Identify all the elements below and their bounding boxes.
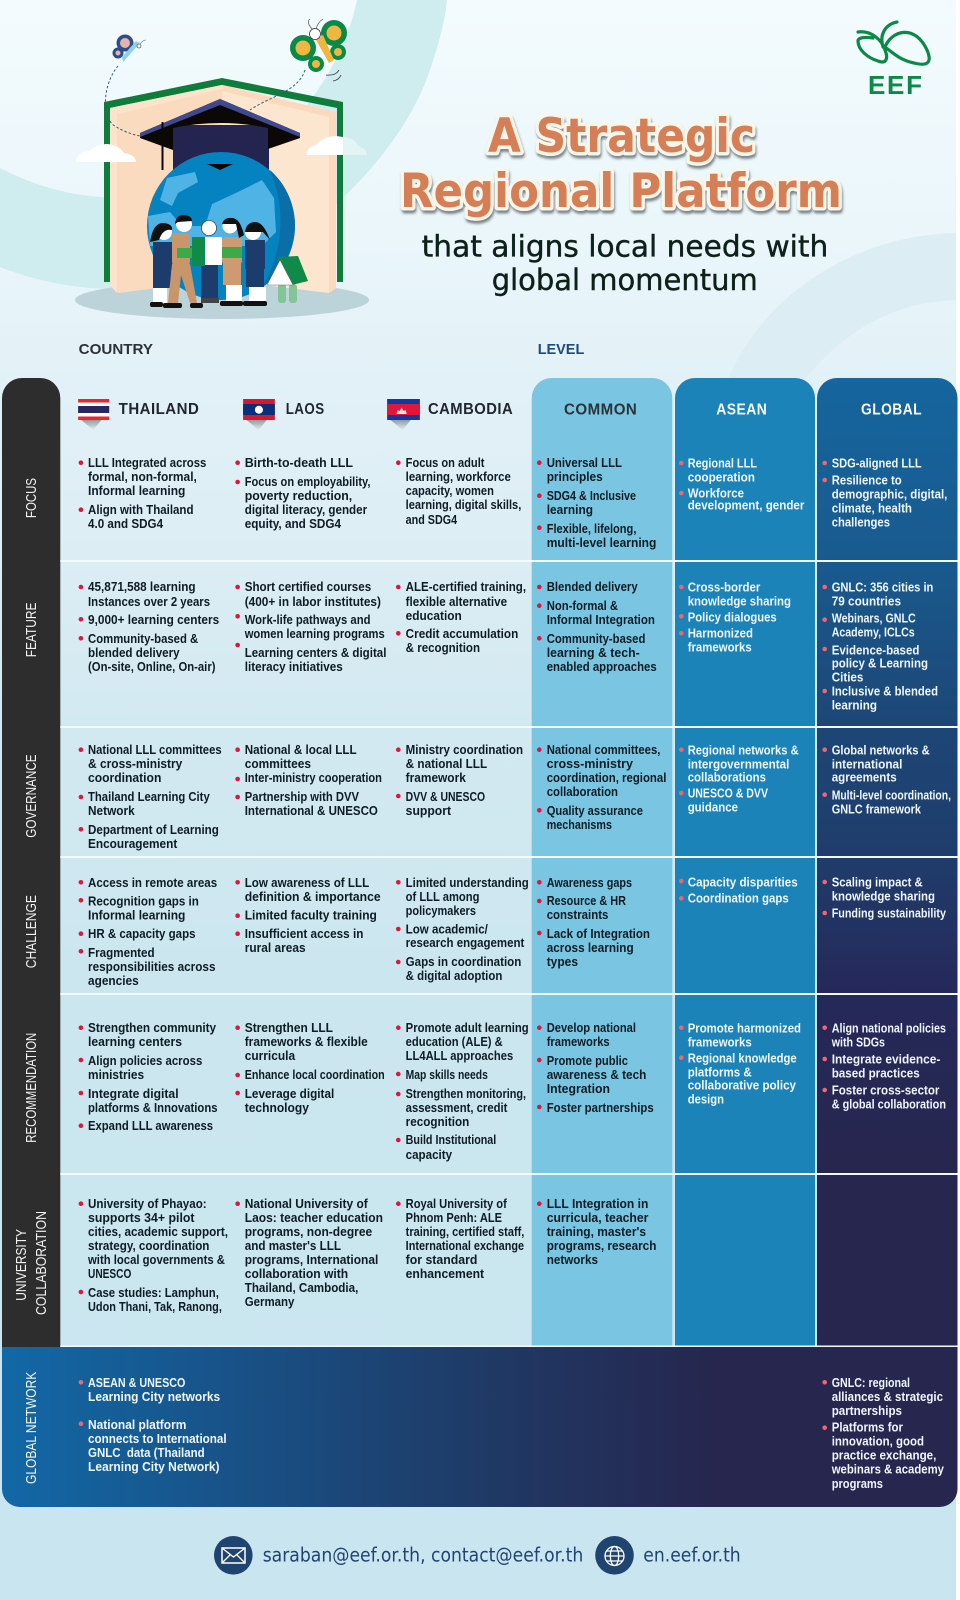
panel: recommendation, Laos: technology xyxy=(245,1101,309,1115)
heading: country: COUNTRY xyxy=(79,341,153,358)
panel: recommendation, common: Foster partnerships xyxy=(547,1101,654,1115)
panel: governance, ASEAN xyxy=(679,743,799,814)
panel: governance, Thailand: Department of Learning xyxy=(88,823,219,837)
icon: web globe xyxy=(595,1536,634,1575)
global network band xyxy=(2,1347,958,1507)
panel: governance, ASEAN: guidance xyxy=(688,800,738,814)
panel: challenge, ASEAN xyxy=(679,875,798,906)
panel: recommendation, global: & global collaboration xyxy=(832,1097,946,1111)
panel: challenge, Cambodia: Gaps in coordination xyxy=(406,955,521,969)
panel: recommendation, Thailand: Align policies across xyxy=(88,1054,202,1068)
panel: governance, ASEAN: UNESCO & DVV xyxy=(688,786,769,800)
panel: feature, ASEAN xyxy=(679,580,791,655)
panel: focus, Laos: Birth-to-death LLL xyxy=(245,456,353,470)
panel: challenge, Cambodia: research engagement xyxy=(406,936,525,950)
panel: governance, Cambodia: Ministry coordination xyxy=(406,743,523,757)
ground shadow xyxy=(75,281,369,319)
panel: recommendation, common: Promote public xyxy=(547,1054,628,1068)
panel: governance, Cambodia: support xyxy=(406,804,452,818)
panel: feature, Cambodia: Credit accumulation xyxy=(406,627,518,641)
panel: recommendation, ASEAN: design xyxy=(688,1092,724,1106)
panel: governance, Laos: Partnership with DVV xyxy=(245,790,360,804)
panel: focus, Laos xyxy=(235,456,370,531)
panel: focus, Thailand: Informal learning xyxy=(88,484,185,498)
panel: challenge, common xyxy=(537,876,650,969)
panel: recommendation, ASEAN xyxy=(679,1021,801,1106)
mascot with bag xyxy=(267,256,308,303)
panel: governance, common: coordination, regional xyxy=(547,771,666,785)
panel: recommendation, Laos: frameworks & flexible xyxy=(245,1035,368,1049)
panel: university collaboration, Laos: Germany xyxy=(245,1295,294,1309)
student left xyxy=(150,223,172,307)
panel: governance, Laos xyxy=(235,743,382,818)
panel: challenge, common: constraints xyxy=(547,908,608,922)
panel: recommendation, Thailand: learning centers xyxy=(88,1035,182,1049)
panel: global network, country: connects to International xyxy=(88,1432,227,1446)
panel: recommendation, Laos: Strengthen LLL xyxy=(245,1021,333,1035)
flight paths xyxy=(105,66,305,136)
panel: governance, Laos: committees xyxy=(245,757,311,771)
panel: challenge, Thailand: Access in remote areas xyxy=(88,876,217,890)
panel: challenge, Laos: definition & importance xyxy=(245,890,381,904)
panel: recommendation, common: awareness & tech xyxy=(547,1068,646,1082)
panel: governance, global: international xyxy=(832,757,902,771)
panel: recommendation, common xyxy=(537,1021,654,1115)
panel: challenge, Cambodia: & digital adoption xyxy=(406,969,502,983)
panel: recommendation, ASEAN: platforms & xyxy=(688,1065,752,1079)
panel: challenge, Thailand xyxy=(79,876,217,988)
panel: governance, Thailand: & cross-ministry xyxy=(88,757,182,771)
panel: feature, ASEAN: Policy dialogues xyxy=(688,610,777,624)
panel: university collaboration, Laos: Thailand, Cambodia, xyxy=(245,1281,358,1295)
panel: recommendation, ASEAN: frameworks xyxy=(688,1035,752,1049)
contact: email: saraban@eef.or.th, contact@eef.or.th xyxy=(263,1543,583,1566)
panel: recommendation, Laos: Leverage digital xyxy=(245,1087,334,1101)
panel: feature, common xyxy=(537,580,657,674)
panel: university collaboration, Thailand: Udon Thani, Tak, Ranong, xyxy=(88,1300,222,1314)
panel: challenge, common: across learning xyxy=(547,941,634,955)
panel: feature, Laos: (400+ in labor institutes) xyxy=(245,595,381,609)
panel: global network, country: Learning City Network) xyxy=(88,1460,220,1474)
header: Cambodia xyxy=(387,399,513,430)
panel: focus, Laos: equity, and SDG4 xyxy=(245,517,341,531)
panel: governance, Thailand: coordination xyxy=(88,771,161,785)
row labels: COLLABORATION xyxy=(34,1211,50,1315)
panel: governance, Laos: International & UNESCO xyxy=(245,804,378,818)
panel: focus, common: principles xyxy=(547,470,603,484)
panel: global network, country: Learning City networks xyxy=(88,1390,220,1404)
panel: recommendation, global: with SDGs xyxy=(831,1035,885,1049)
panel: challenge, common: types xyxy=(547,955,578,969)
globe xyxy=(147,152,295,300)
panel: challenge, Laos: rural areas xyxy=(245,941,306,955)
panel: recommendation, Cambodia: LL4ALL approaches xyxy=(406,1049,513,1063)
panel: feature, Cambodia: flexible alternative xyxy=(406,595,507,609)
panel: challenge, Laos: Insufficient access in xyxy=(245,927,363,941)
panel: focus, Laos: Focus on employability, xyxy=(245,475,370,489)
panel: university collaboration, common: curricula, teacher xyxy=(547,1211,649,1225)
panel: university collaboration, common: programs, research xyxy=(547,1239,656,1253)
panel: university collaboration, Thailand: Case studies: Lamphun, xyxy=(88,1286,219,1300)
teacher with glasses xyxy=(163,215,203,308)
panel: challenge, Cambodia xyxy=(396,876,529,983)
panel: challenge, Thailand: Informal learning xyxy=(88,908,185,922)
panel: governance, common: mechanisms xyxy=(547,818,612,832)
panel: governance, common: collaboration xyxy=(547,785,618,799)
row labels: FOCUS xyxy=(24,478,40,518)
panel: feature, Thailand: 9,000+ learning centers xyxy=(88,613,219,627)
panel: focus, Thailand: 4.0 and SDG4 xyxy=(88,517,163,531)
panel: recommendation, Thailand: Integrate digital xyxy=(88,1087,179,1101)
panel: governance, ASEAN: collaborations xyxy=(688,770,766,784)
panel: university collaboration, Cambodia: for standard xyxy=(406,1253,477,1267)
panel: challenge, common: Awareness gaps xyxy=(547,876,632,890)
panel: university collaboration, Cambodia: International exchange xyxy=(406,1239,524,1253)
panel: focus, Cambodia: Focus on adult xyxy=(406,456,485,470)
panel: governance, Cambodia: & national LLL xyxy=(406,757,487,771)
panel: university collaboration, Cambodia: Phnom Penh: ALE xyxy=(406,1211,502,1225)
panel: focus, global: challenges xyxy=(832,515,890,529)
panel: governance, global: Global networks & xyxy=(832,743,930,757)
man in white coat xyxy=(192,220,222,303)
panel: recommendation, Cambodia: education (ALE) & xyxy=(406,1035,503,1049)
panel: feature, ASEAN: Harmonized xyxy=(688,627,753,641)
graduation cap xyxy=(140,99,300,173)
panel: university collaboration, Laos: programs, non-degree xyxy=(245,1225,372,1239)
teacher in brown xyxy=(220,218,244,306)
panel: university collaboration, Cambodia: Royal University of xyxy=(406,1197,508,1211)
header: Global: GLOBAL xyxy=(861,402,922,419)
panel: challenge, Cambodia: Low academic/ xyxy=(406,922,488,936)
panel: focus, Thailand: formal, non-formal, xyxy=(88,470,197,484)
panel: focus, Cambodia: and SDG4 xyxy=(406,513,457,527)
panel: challenge, global: Scaling impact & xyxy=(832,875,923,889)
panel: feature, Cambodia xyxy=(396,580,526,655)
panel: governance, Laos: Inter-ministry cooperation xyxy=(245,771,382,785)
panel: university collaboration, common: networks xyxy=(547,1253,598,1267)
panel: feature, Thailand xyxy=(79,580,219,674)
panel: challenge, Thailand: responsibilities across xyxy=(88,960,216,974)
panel: feature, Laos: Short certified courses xyxy=(245,580,371,594)
panel: challenge, Laos xyxy=(235,876,381,955)
panel: focus, Thailand: LLL Integrated across xyxy=(88,456,206,470)
panel: recommendation, Thailand: Strengthen community xyxy=(88,1021,216,1035)
panel: focus, Thailand xyxy=(79,456,206,531)
panel: challenge, Laos: Limited faculty training xyxy=(245,908,377,922)
panel: recommendation, Thailand: platforms & Innovations xyxy=(88,1101,218,1115)
panel: feature, global: Academy, ICLCs xyxy=(832,625,915,639)
panel: governance, Thailand: National LLL committees xyxy=(88,743,222,757)
panel: feature, common: enabled approaches xyxy=(547,660,657,674)
panel: global network, country: GNLC data (Thailand xyxy=(88,1446,205,1460)
panel: focus, global: SDG-aligned LLL xyxy=(832,456,922,470)
panel: feature, global: Evidence-based xyxy=(832,643,919,657)
panel: university collaboration, Thailand: with local governments & xyxy=(87,1253,225,1267)
panel: governance, common xyxy=(537,743,666,832)
panel: governance, ASEAN: Regional networks & xyxy=(688,743,799,757)
panel: global network, global xyxy=(822,1376,944,1491)
panel: feature, Thailand: Instances over 2 years xyxy=(88,595,210,609)
panel: focus, Cambodia xyxy=(396,456,521,527)
panel: focus, Laos: digital literacy, gender xyxy=(245,503,367,517)
panel: challenge, Cambodia: Limited understanding xyxy=(406,876,529,890)
panel: university collaboration, Laos: and master's LLL xyxy=(245,1239,341,1253)
panel: feature, Thailand: Community-based & xyxy=(88,632,198,646)
panel: feature, Laos: literacy initiatives xyxy=(245,660,343,674)
panel: feature, common: Non-formal & xyxy=(547,599,618,613)
panel: challenge, Thailand: Fragmented xyxy=(88,946,155,960)
subtitle: that aligns local needs with xyxy=(422,230,828,264)
illustration: book, cap, globe and people xyxy=(75,19,369,319)
panel: governance, Cambodia: DVV & UNESCO xyxy=(406,790,485,804)
panel: challenge, ASEAN: Capacity disparities xyxy=(688,875,798,889)
panel: recommendation, Thailand: ministries xyxy=(88,1068,144,1082)
panel: recommendation, global: Foster cross-sector xyxy=(832,1083,940,1097)
panel: feature, Cambodia: education xyxy=(406,609,462,623)
panel: challenge, global xyxy=(822,875,946,920)
panel: recommendation, Laos: curricula xyxy=(245,1049,296,1063)
panel: focus, ASEAN: Regional LLL xyxy=(688,456,757,470)
panel: governance, Thailand xyxy=(79,743,222,851)
panel: recommendation, Cambodia xyxy=(396,1021,529,1162)
panel: university collaboration, Cambodia xyxy=(396,1197,524,1281)
panel: focus, ASEAN: cooperation xyxy=(688,470,755,484)
column: global xyxy=(817,378,958,1347)
column: asean xyxy=(675,378,815,1347)
panel: focus, common xyxy=(537,456,656,550)
heading: level: LEVEL xyxy=(538,341,584,358)
panel: recommendation, Cambodia: Strengthen monitoring, xyxy=(406,1087,526,1101)
panel: recommendation, global: based practices xyxy=(832,1066,920,1080)
people xyxy=(150,215,270,308)
panel: focus, Thailand: Align with Thailand xyxy=(88,503,194,517)
panel: recommendation, Cambodia: recognition xyxy=(406,1115,469,1129)
panel: recommendation, Laos: Enhance local coordination xyxy=(245,1068,385,1082)
panel: university collaboration, Thailand: UNESCO xyxy=(88,1267,131,1281)
panel: focus, ASEAN: development, gender xyxy=(688,498,805,512)
panel: feature, common: Informal Integration xyxy=(547,613,655,627)
panel: governance, Thailand: Encouragement xyxy=(88,837,178,851)
panel: recommendation, Laos xyxy=(235,1021,385,1115)
header: Thailand xyxy=(78,399,199,430)
panel: global network, global: innovation, good xyxy=(832,1435,924,1449)
panel: challenge, ASEAN: Coordination gaps xyxy=(688,892,789,906)
column: common xyxy=(532,378,672,1347)
panel: recommendation, common: frameworks xyxy=(547,1035,610,1049)
panel: feature, Laos: Learning centers & digital xyxy=(245,646,386,660)
panel: feature, global: Webinars, GNLC xyxy=(832,611,916,625)
panel: challenge, common: Lack of Integration xyxy=(547,927,650,941)
panel: focus, Cambodia: learning, digital skills, xyxy=(406,498,521,512)
logo: EEF: EEF xyxy=(868,70,922,100)
panel: university collaboration, Laos: collaboration with xyxy=(245,1267,348,1281)
panel: global network, global: GNLC: regional xyxy=(832,1376,910,1390)
panel: feature, ASEAN: frameworks xyxy=(688,641,752,655)
panel: university collaboration, Thailand: strategy, coordination xyxy=(88,1239,209,1253)
panel: focus, Cambodia: capacity, women xyxy=(406,484,494,498)
panel: feature, Laos xyxy=(235,580,386,674)
panel: university collaboration, Laos: National University of xyxy=(245,1197,369,1211)
panel: global network, global: practice exchange, xyxy=(832,1449,936,1463)
panel: global network, global: programs xyxy=(832,1477,883,1491)
panel: feature, global: 79 countries xyxy=(832,594,901,608)
panel: recommendation, global: Integrate evidence- xyxy=(832,1052,940,1066)
row labels: GOVERNANCE xyxy=(24,754,40,838)
panel: feature, global: policy & Learning xyxy=(832,657,928,671)
panel: focus, global xyxy=(822,456,947,529)
panel: global network, country: National platform xyxy=(88,1418,186,1432)
header: Laos xyxy=(243,399,325,430)
panel: feature, Cambodia: & recognition xyxy=(406,641,480,655)
clouds xyxy=(76,136,367,162)
panel: global network, country xyxy=(79,1376,227,1474)
panel: feature, ASEAN: knowledge sharing xyxy=(688,594,791,608)
panel: challenge, Thailand: agencies xyxy=(88,974,139,988)
panel: feature, Laos: Work-life pathways and xyxy=(245,613,370,627)
panel: challenge, Cambodia: policymakers xyxy=(406,904,476,918)
panel: recommendation, Thailand: Expand LLL awareness xyxy=(88,1119,213,1133)
panel: recommendation, Cambodia: assessment, credit xyxy=(406,1101,508,1115)
panel: recommendation, global xyxy=(822,1021,946,1111)
panel: feature, global: GNLC: 356 cities in xyxy=(832,580,933,594)
panel: feature, common: learning & tech- xyxy=(547,646,640,660)
title xyxy=(400,109,842,219)
panel: focus, ASEAN xyxy=(679,456,805,512)
panel: focus, Laos: poverty reduction, xyxy=(245,489,352,503)
subtitle xyxy=(422,230,828,297)
icon: blue butterfly xyxy=(112,34,146,62)
panel: governance, global: agreements xyxy=(832,770,897,784)
panel: focus, global: Resilience to xyxy=(832,473,902,487)
panel: feature, Laos: women learning programs xyxy=(244,627,385,641)
panel: global network, global: Platforms for xyxy=(832,1421,903,1435)
panel: governance, global xyxy=(822,743,951,816)
row labels: FEATURE xyxy=(24,602,40,657)
open book xyxy=(104,78,343,293)
panel: recommendation, common: Develop national xyxy=(547,1021,636,1035)
panel: focus, Cambodia: learning, workforce xyxy=(406,470,511,484)
logo: EEF xyxy=(858,22,929,100)
panel: focus, ASEAN: Workforce xyxy=(688,486,744,500)
panel: feature, common: Community-based xyxy=(547,632,645,646)
panel: university collaboration, Thailand: cities, academic support, xyxy=(88,1225,228,1239)
panel: governance, Thailand: Network xyxy=(88,804,135,818)
panel: university collaboration, Thailand: University of Phayao: xyxy=(88,1197,207,1211)
panel: university collaboration, Cambodia: enhancement xyxy=(406,1267,485,1281)
header: Laos: LAOS xyxy=(286,401,325,418)
panel: challenge, Thailand: Recognition gaps in xyxy=(88,894,199,908)
row labels: GLOBAL NETWORK xyxy=(24,1371,40,1484)
panel: university collaboration, Thailand: supports 34+ pilot xyxy=(88,1211,195,1225)
row dividers xyxy=(60,560,958,1348)
panel: governance, Cambodia: framework xyxy=(406,771,466,785)
panel: focus, global: climate, health xyxy=(832,501,912,515)
row labels: RECOMMENDATION xyxy=(24,1033,40,1143)
icon: envelope xyxy=(214,1536,253,1575)
title: A Strategic xyxy=(488,109,755,164)
panel: university collaboration, Laos: programs, International xyxy=(245,1253,378,1267)
panel: global network, country: ASEAN & UNESCO xyxy=(88,1376,186,1390)
panel: recommendation, Cambodia: Map skills needs xyxy=(406,1068,488,1082)
panel: university collaboration, common: training, master's xyxy=(547,1225,646,1239)
panel: feature, global: Cities xyxy=(832,670,863,684)
panel: governance, Thailand: Thailand Learning City xyxy=(88,790,210,804)
panel: governance, global: GNLC framework xyxy=(832,802,921,816)
panel: global network, global: partnerships xyxy=(832,1404,902,1418)
panel: feature, ASEAN: Cross-border xyxy=(688,580,761,594)
panel: governance, Laos: National & local LLL xyxy=(245,743,357,757)
title: Regional Platform xyxy=(400,164,842,219)
panel: challenge, Cambodia: of LLL among xyxy=(406,890,479,904)
panel: challenge, common: Resource & HR xyxy=(547,894,626,908)
icon: green butterfly xyxy=(290,19,347,81)
panel: university collaboration, common: LLL Integration in xyxy=(547,1197,648,1211)
panel: governance, common: cross-ministry xyxy=(547,757,633,771)
contact: website: en.eef.or.th xyxy=(643,1543,741,1566)
panel: university collaboration, common xyxy=(537,1197,656,1267)
panel: feature, common: Blended delivery xyxy=(547,580,638,594)
header: Common: COMMON xyxy=(564,402,637,419)
panel: recommendation, Cambodia: Build Institutional xyxy=(406,1133,496,1147)
panel: university collaboration, Cambodia: training, certified staff, xyxy=(406,1225,524,1239)
panel: focus, common: multi-level learning xyxy=(547,536,656,550)
panel: feature, global xyxy=(822,580,938,712)
subtitle: global momentum xyxy=(492,263,758,297)
sidebar xyxy=(2,378,60,1347)
panel: global network, global: webinars & academy xyxy=(831,1463,944,1477)
panel: recommendation, ASEAN: Regional knowledge xyxy=(688,1051,797,1065)
row labels xyxy=(14,478,50,1484)
panel: recommendation, ASEAN: collaborative policy xyxy=(688,1078,796,1092)
row labels: UNIVERSITY xyxy=(14,1229,30,1301)
panel: university collaboration, Thailand xyxy=(79,1197,228,1314)
panel: recommendation, common: Integration xyxy=(547,1082,610,1096)
header: Cambodia: CAMBODIA xyxy=(428,401,513,418)
panel: global network, global: alliances & strategic xyxy=(832,1390,943,1404)
header: Thailand: THAILAND xyxy=(119,401,199,418)
panel: focus, common: SDG4 & Inclusive xyxy=(547,489,636,503)
panel: focus, common: Universal LLL xyxy=(547,456,622,470)
panel: feature, Cambodia: ALE-certified training, xyxy=(406,580,526,594)
panel: challenge, Thailand: HR & capacity gaps xyxy=(88,927,196,941)
panel: challenge, global: knowledge sharing xyxy=(832,889,935,903)
panel: challenge, Laos: Low awareness of LLL xyxy=(245,876,369,890)
panel: recommendation, Cambodia: Promote adult learning xyxy=(406,1021,529,1035)
panel: feature, global: Inclusive & blended xyxy=(832,684,938,698)
panel: feature, Thailand: blended delivery xyxy=(88,646,180,660)
panel: focus, global: demographic, digital, xyxy=(832,487,947,501)
panel: feature, Thailand: (On-site, Online, On-air) xyxy=(88,660,216,674)
panel: governance, common: National committees, xyxy=(547,743,660,757)
student right xyxy=(243,222,270,306)
panel: governance, common: Quality assurance xyxy=(547,804,643,818)
panel: governance, Cambodia xyxy=(396,743,523,818)
panel: recommendation, Thailand xyxy=(79,1021,218,1133)
panel: feature, global: learning xyxy=(832,698,877,712)
panel: feature, Thailand: 45,871,588 learning xyxy=(88,580,196,594)
panel: focus, common: learning xyxy=(547,503,593,517)
panel: recommendation, Cambodia: capacity xyxy=(406,1148,452,1162)
row labels: CHALLENGE xyxy=(24,895,40,968)
header: ASEAN: ASEAN xyxy=(716,402,767,419)
panel: university collaboration, Laos xyxy=(235,1197,383,1309)
panel: recommendation, ASEAN: Promote harmonized xyxy=(688,1021,801,1035)
panel: focus, common: Flexible, lifelong, xyxy=(547,522,636,536)
panel: governance, ASEAN: intergovernmental xyxy=(688,757,789,771)
panel: university collaboration, Laos: Laos: teacher education xyxy=(245,1211,383,1225)
